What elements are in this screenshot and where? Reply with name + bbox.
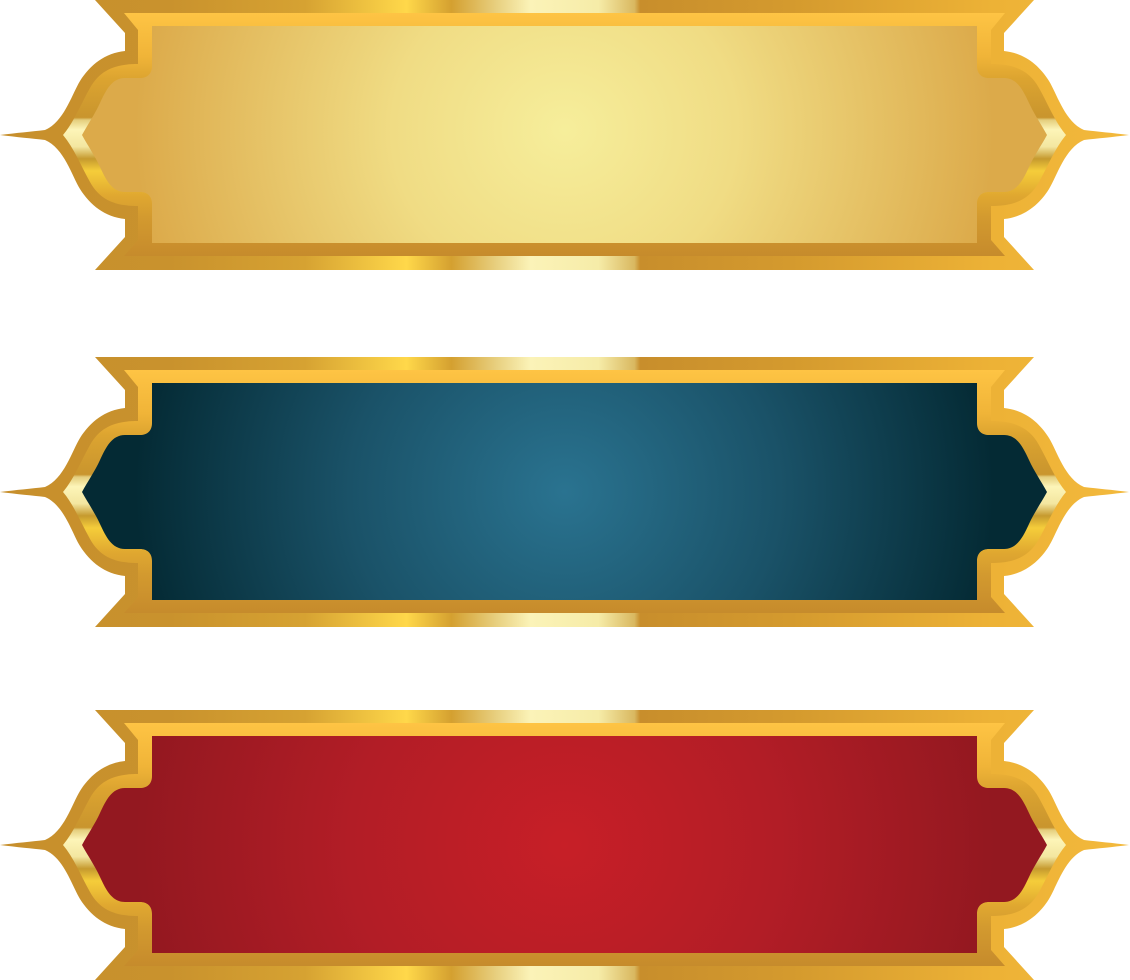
blue panel bbox=[82, 383, 1047, 600]
inner frame bbox=[63, 13, 1066, 256]
gold panel bbox=[82, 26, 1047, 243]
outer frame bbox=[0, 710, 1129, 980]
banner: blue bbox=[0, 357, 1129, 627]
banner: red bbox=[0, 710, 1129, 980]
red panel bbox=[82, 736, 1047, 953]
inner frame bbox=[63, 370, 1066, 613]
outer frame bbox=[0, 0, 1129, 270]
banner: gold bbox=[0, 0, 1129, 270]
outer frame bbox=[0, 357, 1129, 627]
inner frame bbox=[63, 723, 1066, 966]
